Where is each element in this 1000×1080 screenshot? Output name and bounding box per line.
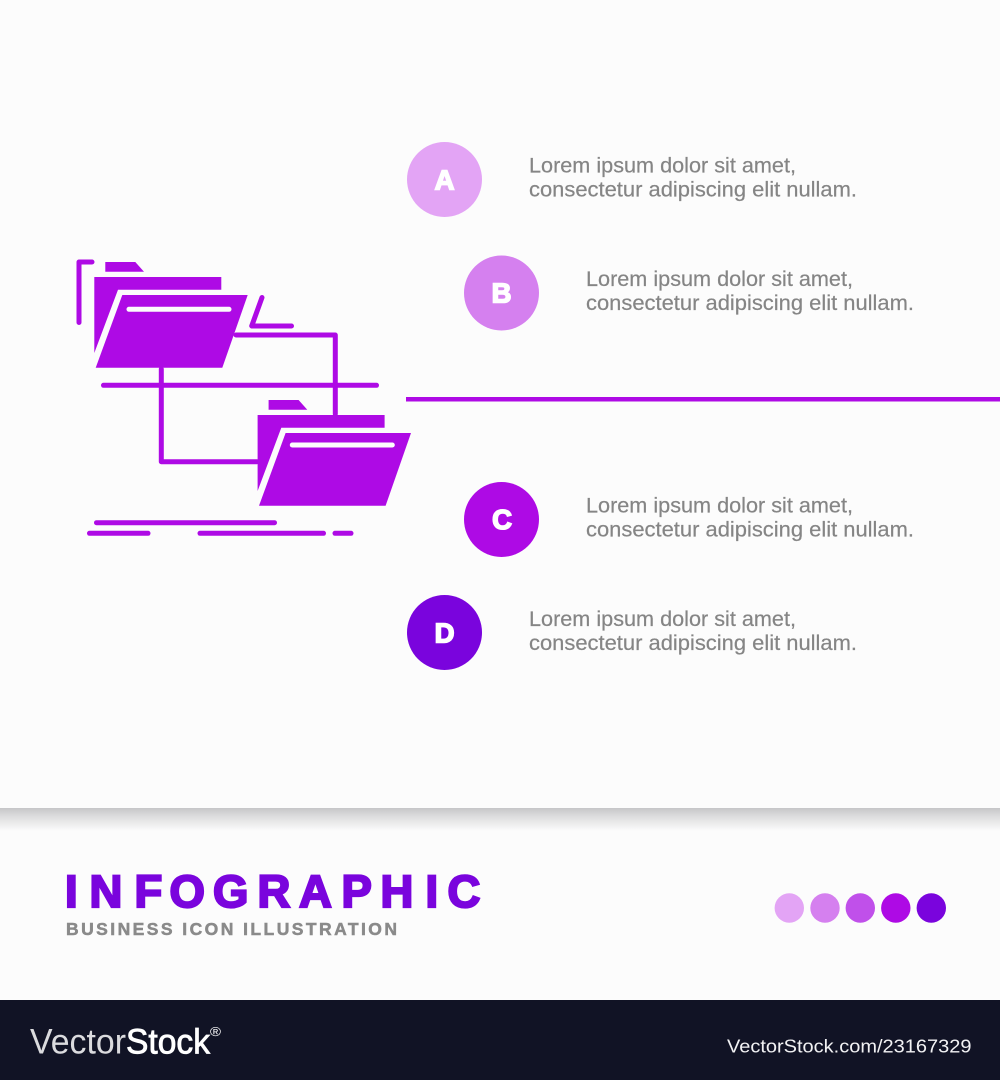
- step C: C: [492, 504, 512, 535]
- step D: Lorem ipsum dolor sit amet,: [529, 608, 796, 631]
- step D: D: [435, 618, 454, 648]
- top folder: [94, 262, 248, 368]
- icon: networked folders: [79, 262, 411, 533]
- step C: [464, 482, 914, 557]
- shadow band: [0, 808, 1000, 831]
- step C: Lorem ipsum dolor sit amet,: [586, 495, 853, 518]
- step D: consectetur adipiscing elit nullam.: [529, 632, 857, 655]
- step A: consectetur adipiscing elit nullam.: [529, 178, 857, 202]
- footer url: VectorStock.com/23167329: [727, 1036, 972, 1057]
- footer logo: Stock: [126, 1022, 210, 1061]
- palette dots: [775, 893, 946, 923]
- step B: [464, 256, 914, 330]
- title: INFOGRAPHIC: [65, 866, 480, 917]
- step A: [407, 142, 857, 217]
- footer logo: ®: [210, 1024, 221, 1039]
- footer bar: [0, 1000, 1000, 1080]
- footer logo: Vector: [30, 1022, 126, 1061]
- connector lines: [79, 262, 376, 462]
- footer logo: [30, 1022, 221, 1061]
- subtitle: BUSINESS ICON ILLUSTRATION: [66, 919, 397, 939]
- ground lines: [90, 523, 351, 533]
- step A: Lorem ipsum dolor sit amet,: [529, 155, 796, 178]
- step B: B: [492, 278, 511, 308]
- timeline axis: [406, 397, 1000, 402]
- step B: Lorem ipsum dolor sit amet,: [586, 268, 853, 291]
- step A: A: [435, 164, 455, 196]
- step C: consectetur adipiscing elit nullam.: [586, 518, 914, 542]
- bottom folder: [258, 400, 411, 506]
- step D: [407, 595, 857, 670]
- step B: consectetur adipiscing elit nullam.: [586, 292, 914, 315]
